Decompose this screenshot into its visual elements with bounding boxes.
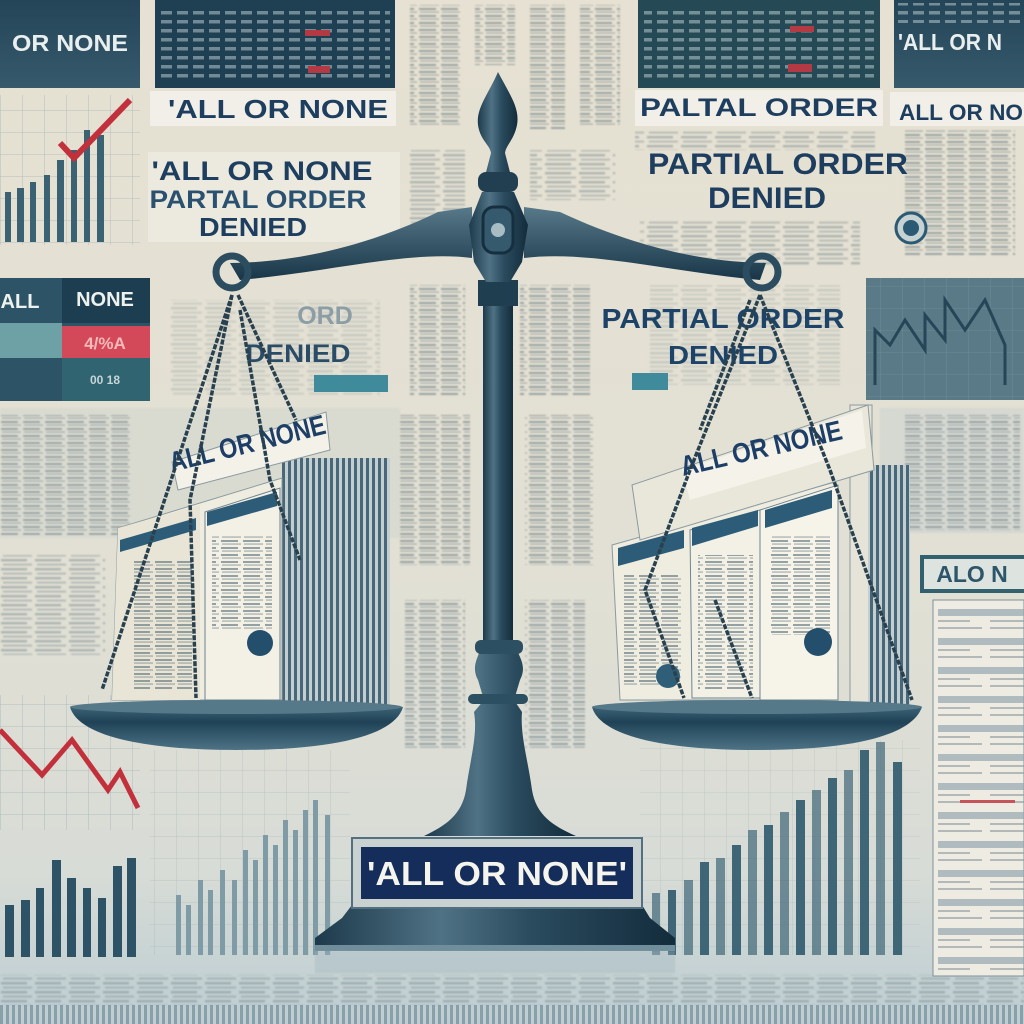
scale: beam: [216, 207, 778, 288]
text: faded order denied: [246, 302, 388, 392]
chart: bars bottom center left: [150, 750, 350, 955]
bottom tick strip: [0, 1005, 1024, 1024]
heading: partial order denied right: [648, 148, 908, 215]
scale: center hub and finial: [469, 72, 528, 282]
panel: all none left dashboard: ALL: [1, 291, 39, 313]
panel: alon label and table: ALO N: [936, 561, 1008, 587]
nameplate: [352, 838, 642, 908]
chart: red line bottom left: [0, 695, 140, 830]
left document stack: [112, 409, 390, 706]
chart: bars bottom right: [640, 740, 920, 955]
panel: alon label and table: [920, 555, 1024, 976]
scale: base: [315, 905, 675, 951]
panel: right dark chart: [866, 278, 1024, 400]
icon: seal top right: [896, 213, 926, 243]
panel: top center table with heading: [635, 0, 883, 126]
chart: bars bottom left: [5, 858, 136, 957]
panel: top-left dark ticker: [0, 0, 140, 88]
right document stack: ALL OR NONE: [677, 415, 845, 482]
text: faded order denied: DENIED: [246, 340, 350, 368]
heading: all or none, partial order denied left: PARTAL ORDER: [150, 186, 366, 214]
left chains: [102, 295, 300, 698]
right chains: [645, 295, 912, 700]
chart: top-left bars with red arrow: [0, 95, 140, 245]
panel: top table with heading: [150, 0, 396, 126]
panel: all none left dashboard: NONE: [76, 289, 134, 311]
panel: top center table with heading: PALTAL ORDER: [640, 94, 878, 122]
nameplate: 'ALL OR NONE': [367, 855, 627, 892]
heading: partial order denied right: PARTIAL ORDER: [648, 148, 908, 181]
scale: pole: [424, 280, 576, 836]
panel: top table with heading: 'ALL OR NONE: [168, 94, 388, 124]
panel: top-right table with heading: [890, 0, 1024, 126]
heading: partial order denied center right: PARTIAL ORDER: [602, 303, 844, 334]
heading: all or none, partial order denied left: 'ALL OR NONE: [152, 156, 372, 186]
base reflection: [315, 951, 675, 973]
left pan: [70, 700, 403, 750]
right pan: [592, 700, 922, 750]
left document stack: ALL OR NONE: [166, 409, 329, 478]
heading: partial order denied center right: [602, 303, 844, 390]
heading: all or none, partial order denied left: [148, 152, 400, 242]
heading: partial order denied right: DENIED: [708, 182, 826, 215]
panel: all none left dashboard: 4/%A: [84, 334, 126, 353]
heading: partial order denied center right: DENIED: [668, 340, 778, 370]
panel: all none left dashboard: 00 18: [90, 373, 120, 387]
panel: top-left dark ticker: OR NONE: [12, 30, 128, 56]
heading: all or none, partial order denied left: DENIED: [199, 212, 307, 242]
panel: top-right table with heading: ALL OR NO: [899, 100, 1023, 125]
panel: top-right table with heading: 'ALL OR N: [898, 29, 1002, 55]
right document stack: [612, 405, 910, 705]
panel: all none left dashboard: [0, 278, 150, 401]
text: faded order denied: ORD: [297, 302, 353, 330]
